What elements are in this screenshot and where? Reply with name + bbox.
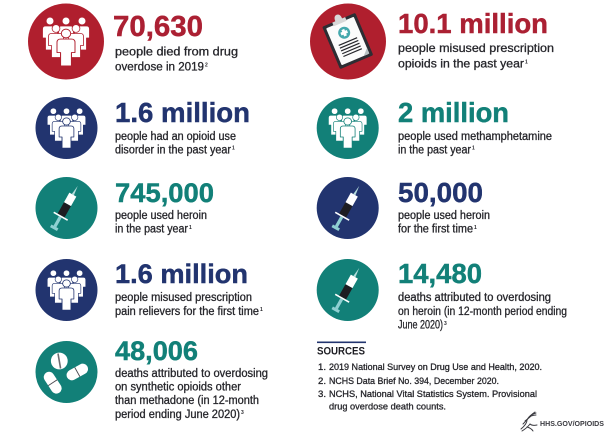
description: 1	[474, 225, 477, 231]
description: 3	[444, 321, 447, 327]
source list: 2019 National Survey on Drug Use and Health, 2020.	[329, 362, 542, 373]
stat: 1.6 million misused pain relievers	[36, 259, 263, 321]
description: than methadone (in 12-month	[115, 395, 259, 407]
stat: 745,000 used heroin	[36, 177, 214, 239]
stat: 1.6 million opioid use disorder	[36, 97, 250, 159]
number: 48,006: 48,006	[115, 336, 198, 366]
description: people died from drug	[115, 47, 238, 59]
description: in the past year	[398, 144, 471, 156]
description	[398, 292, 567, 332]
icon: syringe on teal circle	[36, 177, 98, 239]
source list: NCHS, National Vital Statistics System. Provisional	[329, 389, 537, 400]
description: people misused prescription	[398, 41, 554, 55]
description: deaths attributed to overdosing	[398, 292, 551, 304]
description: people misused prescription	[115, 292, 252, 304]
heading: sources: SOURCES	[317, 346, 365, 358]
source list: drug overdose death counts.	[329, 402, 446, 412]
description: people used heroin	[115, 210, 207, 222]
description: people had an opioid use	[115, 131, 236, 143]
description: on heroin (in 12-month period ending	[398, 306, 567, 318]
stat: 10.1 million misused prescription opioids	[310, 4, 554, 80]
number: 2 million: 2 million	[398, 97, 509, 128]
description	[115, 47, 238, 74]
description: 1	[232, 146, 235, 152]
number: 14,480: 14,480	[398, 258, 482, 289]
stat: 48,006 synthetic opioid deaths	[36, 336, 268, 421]
link text: HHS.GOV/OPIOIDS	[540, 419, 604, 428]
description: disorder in the past year	[115, 144, 231, 156]
description	[115, 292, 263, 318]
icon: people group on navy circle	[36, 97, 98, 159]
source list: NCHS Data Brief No. 394, December 2020.	[329, 376, 499, 387]
icon: people group on navy circle	[36, 259, 98, 321]
description	[398, 131, 552, 156]
description: on synthetic opioids other	[115, 382, 241, 394]
description: for the first time	[398, 224, 473, 236]
description: deaths attributed to overdosing	[115, 368, 268, 380]
number: 1.6 million: 1.6 million	[115, 259, 248, 289]
description	[115, 131, 236, 156]
description: period ending June 2020)	[115, 409, 240, 421]
description	[398, 41, 554, 71]
description: pain relievers for the first time	[115, 306, 259, 318]
description: 1	[260, 307, 263, 313]
description: overdose in 2019	[115, 62, 204, 74]
source list: 2.	[318, 376, 326, 387]
stat: 50,000 first-time heroin users	[317, 177, 490, 239]
description: June 2020)	[398, 320, 443, 332]
description: opioids in the past year	[398, 57, 524, 71]
description: 3	[241, 410, 244, 416]
stat: 14,480 heroin overdose deaths	[317, 258, 567, 332]
source list: 1.	[318, 362, 326, 373]
icon: people group on red circle	[28, 4, 104, 80]
number: 745,000: 745,000	[115, 178, 214, 208]
number: 70,630: 70,630	[113, 11, 203, 43]
number: 10.1 million: 10.1 million	[398, 8, 548, 39]
source list	[318, 362, 542, 412]
description	[115, 210, 207, 236]
source list: 3.	[318, 389, 326, 400]
icon: pills on teal circle	[36, 341, 98, 403]
icon: people group on teal circle	[317, 97, 379, 159]
description: 1	[472, 146, 475, 152]
icon: syringe on navy circle	[317, 177, 379, 239]
icon: syringe on teal circle	[317, 259, 379, 321]
icon: HHS eagle logo	[521, 412, 537, 431]
number: 1.6 million: 1.6 million	[115, 97, 250, 128]
description: 2	[205, 62, 208, 68]
description: people used heroin	[398, 210, 490, 222]
icon: clipboard on red circle	[310, 4, 386, 80]
stat: 70,630 drug overdose deaths	[28, 4, 238, 80]
description: people used methamphetamine	[398, 131, 552, 143]
footer: HHS logo and URL	[521, 412, 604, 431]
description	[115, 368, 268, 421]
description: 1	[189, 225, 192, 231]
number: 50,000: 50,000	[398, 177, 483, 208]
description: 1	[525, 60, 528, 66]
description: in the past year	[115, 224, 188, 236]
panel: sources	[317, 342, 542, 412]
stat: 2 million used methamphetamine	[317, 97, 552, 159]
description	[398, 210, 490, 236]
